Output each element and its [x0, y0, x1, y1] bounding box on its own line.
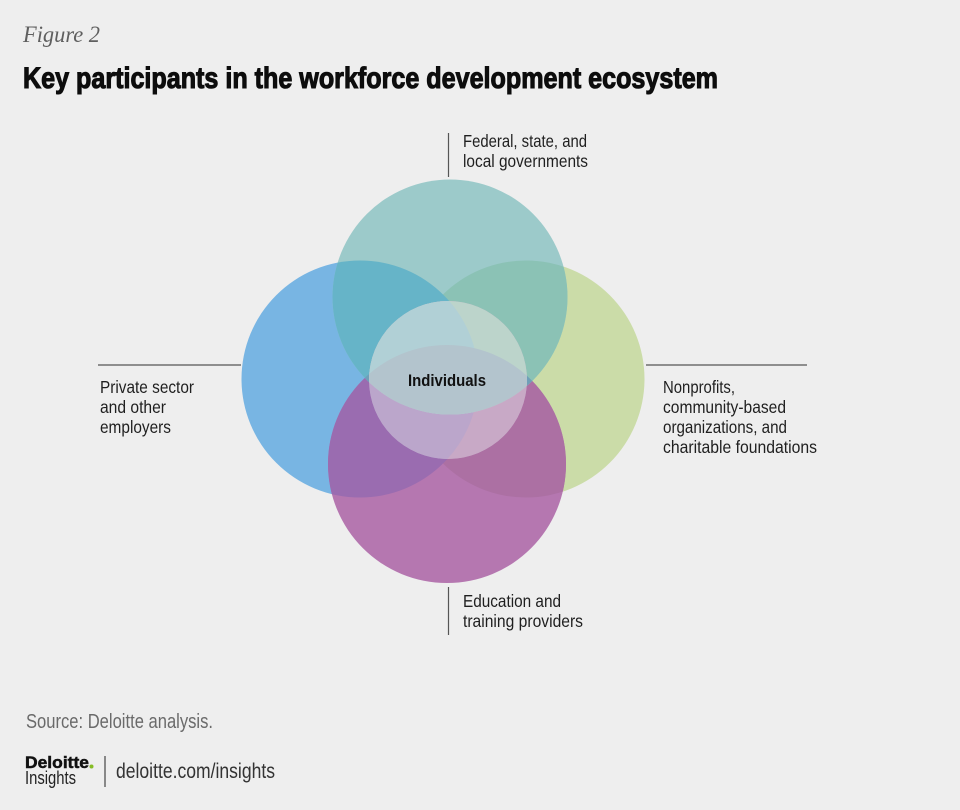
- circle: nonprofits: [408, 260, 644, 498]
- callout: private sector: [98, 365, 241, 437]
- callout: governments: Federal, state, and: [463, 131, 587, 151]
- circle: education and training: [328, 345, 566, 583]
- label: individuals: Individuals: [408, 371, 486, 390]
- website link: deloitte.com/insights: [116, 760, 275, 783]
- callout: nonprofits: charitable foundations: [663, 437, 817, 457]
- overlap: governments and private sector: [332, 260, 449, 382]
- callout: nonprofits: community-based: [663, 397, 786, 417]
- callout: nonprofits: [646, 365, 817, 457]
- logo: Deloitte Insights: [25, 753, 94, 788]
- callout: nonprofits: organizations, and: [663, 417, 787, 437]
- callout: education: [448, 587, 583, 635]
- overlap: education and private sector: [328, 378, 447, 498]
- callout: private sector: employers: [100, 417, 171, 437]
- circle: governments: [332, 180, 568, 414]
- callout: private sector: and other: [100, 397, 166, 417]
- callout: education: training providers: [463, 611, 583, 631]
- source note: Source: Deloitte analysis.: [26, 711, 213, 733]
- center circle: individuals: [369, 301, 527, 459]
- overlap: governments and nonprofits: [443, 260, 568, 386]
- callout: education: Education and: [463, 591, 561, 611]
- overlap: governments and education: [365, 374, 532, 386]
- callout: governments: local governments: [463, 151, 588, 171]
- circle: private sector: [242, 260, 478, 498]
- callout: nonprofits: Nonprofits,: [663, 377, 735, 397]
- logo: Deloitte Insights: Insights: [25, 768, 76, 788]
- venn diagram: [242, 180, 644, 583]
- title: Key participants in the workforce development ecosystem: [23, 62, 718, 95]
- logo: Deloitte Insights: Deloitte: [25, 753, 89, 772]
- callout: private sector: Private sector: [100, 377, 194, 397]
- callout: governments: [448, 131, 588, 177]
- overlap: education and nonprofits: [444, 381, 566, 498]
- figure label: Figure 2: [22, 22, 100, 47]
